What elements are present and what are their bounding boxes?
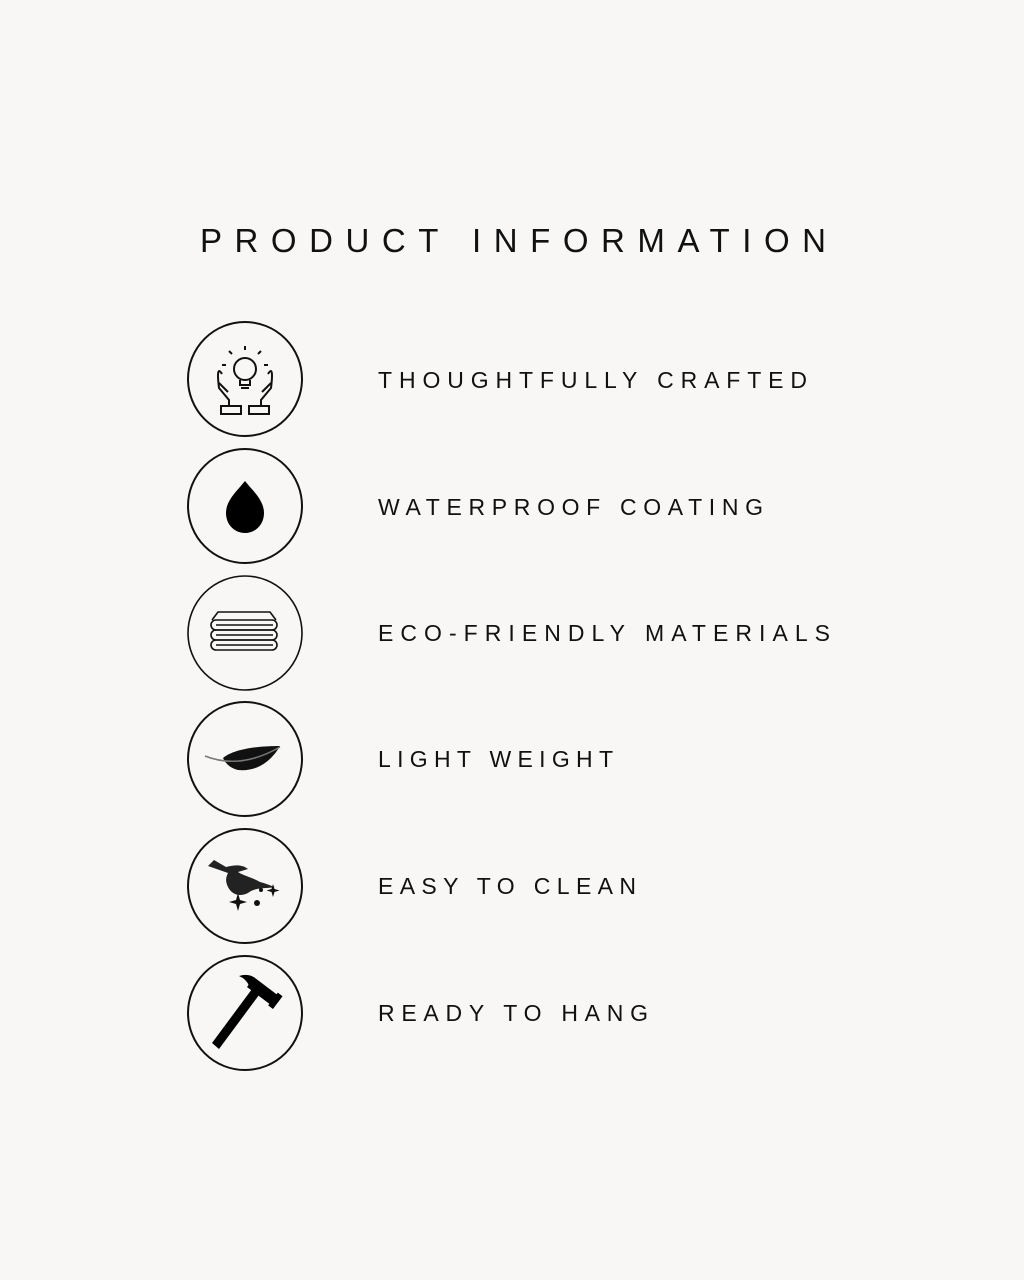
row: ready to hang	[188, 956, 648, 1070]
icon: feather	[188, 702, 302, 816]
row: thoughtfully crafted	[188, 322, 807, 436]
label: ECO-FRIENDLY MATERIALS	[378, 620, 830, 646]
icon: hands with lightbulb	[188, 322, 302, 436]
icon: water drop	[188, 449, 302, 563]
label: LIGHT WEIGHT	[378, 746, 613, 772]
row: eco-friendly materials	[188, 576, 830, 690]
row: easy to clean	[188, 829, 636, 943]
label: WATERPROOF COATING	[378, 494, 763, 520]
label: READY TO HANG	[378, 1000, 648, 1026]
label: EASY TO CLEAN	[378, 873, 636, 899]
label: THOUGHTFULLY CRAFTED	[378, 367, 807, 393]
icon: hammer	[188, 956, 302, 1070]
icon: folded fabric	[188, 576, 302, 690]
row: waterproof coating	[188, 449, 763, 563]
row: light weight	[188, 702, 613, 816]
title: PRODUCT INFORMATION	[200, 222, 826, 259]
icon: hand wiping	[188, 829, 302, 943]
